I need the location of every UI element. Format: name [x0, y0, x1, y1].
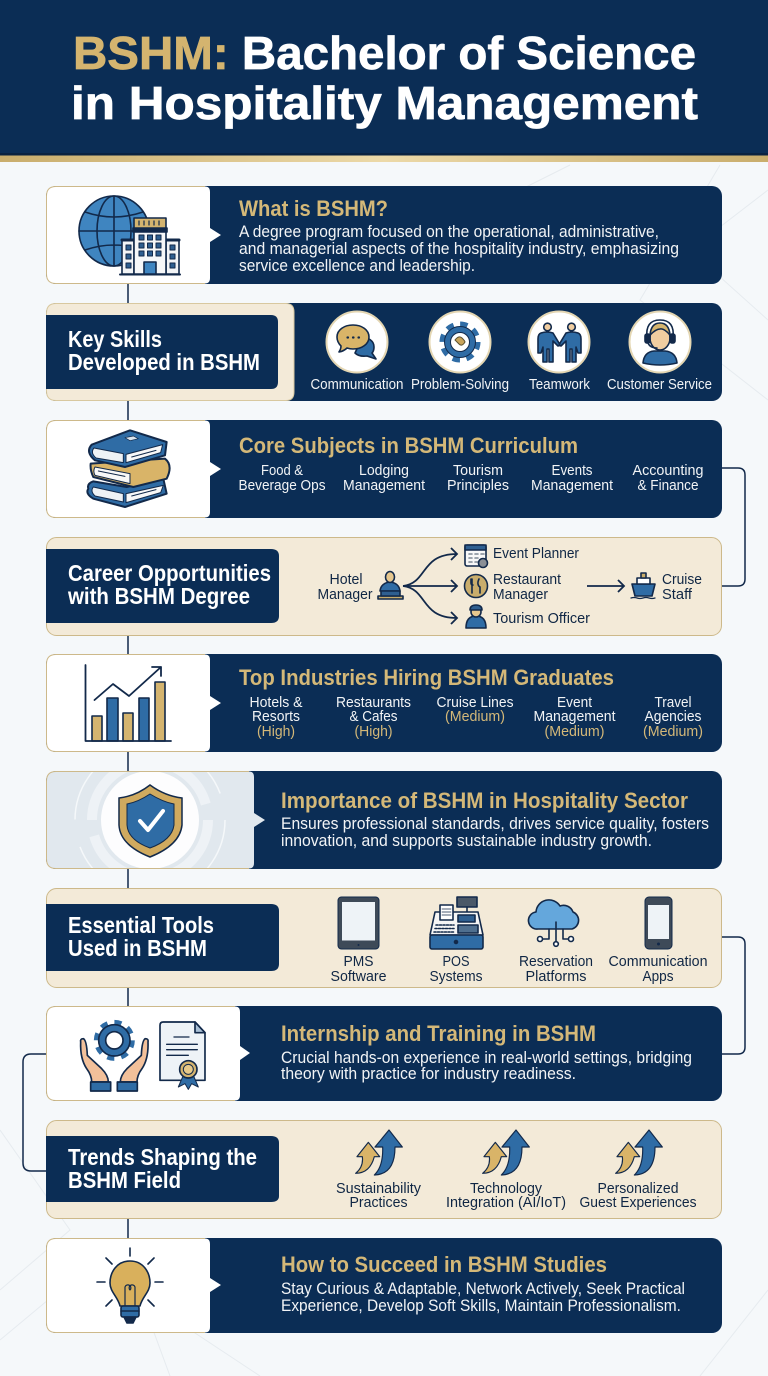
tool labels: Systems [430, 968, 482, 985]
industry list: Management [534, 708, 616, 725]
trend labels: Practices [350, 1194, 408, 1211]
subject list: Lodging [359, 462, 409, 479]
panel: How to Succeed [46, 1238, 722, 1333]
industry list: Travel [654, 694, 692, 711]
industry list: Agencies [644, 708, 702, 725]
icon: light bulb [97, 1248, 163, 1323]
skill labels: Teamwork [529, 376, 590, 393]
description text [281, 815, 709, 850]
description text: service excellence and leadership. [239, 257, 475, 275]
industry list: Resorts [252, 708, 300, 725]
career flow chart: Tourism Officer [493, 610, 590, 627]
subject list: Tourism [453, 462, 503, 479]
title: in Hospitality Management [71, 77, 698, 129]
icon: hands, gear and certificate [81, 1022, 205, 1091]
panel: What is BSHM: What is BSHM? [239, 196, 388, 221]
description text [281, 1280, 685, 1315]
career flow chart: Event Planner [493, 545, 579, 562]
industry list: (High) [257, 723, 295, 740]
icon: problem solving [430, 312, 490, 372]
panel: Key Skills: Developed in BSHM [68, 349, 260, 375]
description text: Stay Curious & Adaptable, Network Actively, Seek Practical [281, 1280, 685, 1298]
icon: calendar [465, 545, 488, 568]
icon: books [87, 430, 170, 507]
panel: How to Succeed: How to Succeed in BSHM Studies [281, 1252, 607, 1277]
tool labels: Communication [608, 953, 708, 970]
subject list: Principles [447, 477, 509, 494]
description text: Experience, Develop Soft Skills, Maintain Professionalism. [281, 1297, 681, 1315]
icon: bar chart [86, 665, 171, 741]
icon: globe and hotel [79, 196, 180, 274]
career flow chart: Manager [493, 586, 548, 603]
description text [281, 1049, 692, 1083]
career flow chart [318, 545, 702, 628]
panel: Essential Tools [46, 888, 722, 988]
industry list: (High) [354, 723, 393, 740]
subject list: Management [343, 477, 426, 494]
icon: teamwork [528, 312, 590, 372]
panel: Trends [46, 1120, 722, 1218]
description text: and managerial aspects of the hospitality industry, emphasizing [239, 240, 679, 258]
tool labels: POS [442, 953, 470, 970]
description text: innovation, and supports sustainable industry growth. [281, 832, 652, 850]
subject list: Management [531, 477, 614, 494]
panel: Essential Tools: Essential Tools [68, 912, 214, 938]
career flow chart: Staff [662, 586, 693, 603]
icon: hotel manager [378, 572, 403, 599]
panel: Key Skills [46, 303, 722, 401]
industry list: Hotels & [250, 694, 302, 711]
career flow chart: Hotel [330, 571, 362, 588]
panel: Core Subjects: Core Subjects in BSHM Curriculum [239, 433, 578, 458]
career flow chart: Cruise [662, 571, 702, 588]
career flow chart: Manager [318, 586, 373, 603]
industry list: Cruise Lines [436, 694, 514, 711]
panel: Essential Tools: Used in BSHM [68, 935, 207, 961]
icon: tablet [338, 897, 379, 949]
panel: Core Subjects [46, 420, 722, 518]
icon: tourism officer [466, 605, 486, 628]
subject list [238, 462, 704, 494]
industry list: (Medium) [445, 708, 505, 725]
icon: cruise ship [631, 573, 655, 598]
trend labels: Personalized [598, 1180, 678, 1197]
description text: Crucial hands-on experience in real-world settings, bridging [281, 1049, 692, 1067]
title [71, 27, 698, 129]
subject list: Food & [261, 462, 303, 479]
description text: A degree program focused on the operational, administrative, [239, 223, 659, 241]
panel: Importance [46, 771, 722, 869]
career flow chart: Restaurant [493, 571, 562, 588]
panel: Trends: Trends Shaping the [68, 1144, 257, 1170]
panel: Trends: BSHM Field [68, 1167, 181, 1193]
icon: POS register [430, 897, 483, 949]
trend labels: Technology [470, 1180, 542, 1197]
skill labels: Customer Service [607, 376, 712, 393]
panel: Importance: Importance of BSHM in Hospitality Sector [281, 788, 688, 813]
panel: Career Opportunities [46, 538, 722, 636]
icon: cloud network [528, 900, 579, 946]
subject list: & Finance [638, 477, 698, 494]
panel: Top Industries [46, 654, 722, 752]
trend labels: Sustainability [336, 1180, 421, 1197]
tool labels: Platforms [526, 968, 586, 985]
title: BSHM: Bachelor of Science [73, 27, 696, 79]
header banner [0, 0, 768, 162]
subject list: Events [552, 462, 592, 479]
skill labels [310, 376, 712, 393]
industry list [250, 694, 703, 740]
panel: Career Opportunities: with BSHM Degree [67, 583, 250, 609]
skill labels: Communication [310, 376, 404, 393]
industry list: Event [557, 694, 593, 711]
flow arrows [403, 548, 624, 624]
panel: Internship: Internship and Training in BSHM [281, 1021, 596, 1046]
icon: rising arrows 1 [356, 1130, 402, 1175]
industry list: (Medium) [544, 723, 605, 740]
icon: shield [74, 772, 226, 868]
panel: Key Skills: Key Skills [68, 326, 162, 352]
trend labels [336, 1180, 696, 1211]
icon: restaurant [464, 574, 488, 598]
icon: smartphone [645, 897, 672, 949]
industry list: Restaurants [336, 694, 411, 711]
industry list: (Medium) [643, 723, 703, 740]
tool labels: Apps [642, 968, 674, 985]
description text: theory with practice for industry readiness. [281, 1065, 576, 1083]
icon: communication [326, 312, 388, 372]
subject list: Beverage Ops [238, 477, 326, 494]
industry list: & Cafes [350, 708, 398, 725]
panel: Internship [46, 1006, 722, 1101]
subject list: Accounting [632, 462, 704, 479]
icon: rising arrows 2 [483, 1130, 529, 1175]
icon: rising arrows 3 [616, 1130, 662, 1175]
tool labels [330, 953, 708, 985]
trend labels: Integration (AI/IoT) [446, 1194, 566, 1211]
tool labels: PMS [344, 953, 374, 970]
description text: Ensures professional standards, drives service quality, fosters [281, 815, 709, 833]
icon: customer service [630, 312, 690, 372]
trend labels: Guest Experiences [580, 1194, 696, 1211]
tool labels: Software [330, 968, 386, 985]
tool labels: Reservation [519, 953, 593, 970]
panel: What is BSHM [46, 186, 722, 284]
skill labels: Problem-Solving [411, 376, 509, 393]
panel: Career Opportunities: Career Opportunities [68, 560, 271, 586]
panel: Top Industries: Top Industries Hiring BSHM Graduates [239, 665, 614, 690]
description text [239, 223, 679, 275]
